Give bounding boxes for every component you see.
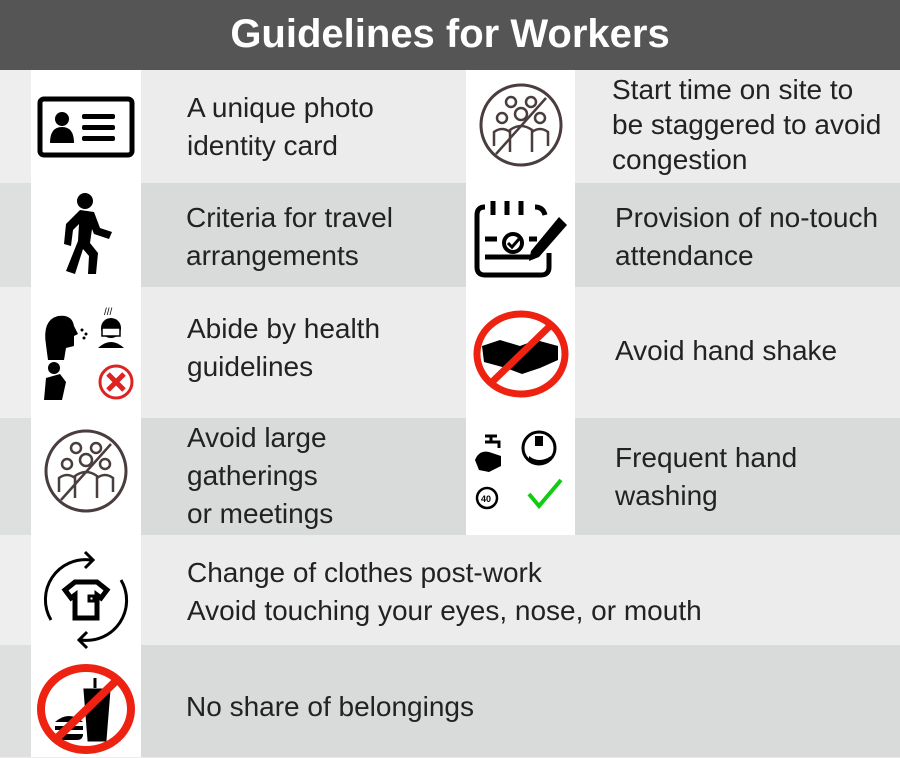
text: photo id: identity card bbox=[187, 130, 338, 161]
icon: health symptoms: /// bbox=[104, 307, 113, 318]
icon: walking person bbox=[64, 193, 112, 274]
text: staggered start: congestion bbox=[612, 144, 747, 175]
icon: no food sharing bbox=[37, 664, 135, 754]
text: attendance: Provision of no-touch bbox=[615, 202, 878, 233]
text: staggered start: Start time on site to bbox=[612, 74, 853, 105]
icon: no-touch attendance bbox=[474, 201, 567, 278]
text: gatherings: or meetings bbox=[187, 498, 333, 529]
left icon column bbox=[31, 70, 141, 757]
icon: staggered start bbox=[480, 84, 562, 166]
text: attendance: attendance bbox=[615, 240, 754, 271]
text: health bbox=[187, 313, 380, 382]
icon: hand washing bbox=[475, 430, 562, 510]
text: health: guidelines bbox=[187, 351, 313, 382]
title bar: Guidelines for Workers bbox=[230, 12, 670, 56]
text: hand washing: Frequent hand bbox=[615, 442, 797, 473]
icon: no gatherings bbox=[44, 430, 128, 512]
right icon column bbox=[466, 70, 575, 535]
icon: health symptoms bbox=[44, 307, 134, 400]
text: photo id: A unique photo bbox=[187, 92, 374, 123]
title bar bbox=[0, 0, 900, 70]
text: travel: Criteria for travel bbox=[186, 202, 393, 233]
text: clothes: Avoid touching your eyes, nose, or mouth bbox=[187, 595, 702, 626]
text: gatherings bbox=[187, 422, 333, 529]
icon: no handshake bbox=[474, 310, 568, 398]
text: travel bbox=[186, 202, 393, 271]
icon: id card bbox=[38, 96, 134, 158]
text: attendance bbox=[615, 202, 878, 271]
text: travel: arrangements bbox=[186, 240, 359, 271]
text: staggered start bbox=[612, 74, 881, 175]
text: handshake: Avoid hand shake bbox=[615, 335, 837, 366]
text: gatherings: Avoid large bbox=[187, 422, 327, 453]
text: clothes bbox=[187, 557, 702, 626]
text: belongings: No share of belongings bbox=[186, 691, 474, 722]
text: health: Abide by health bbox=[187, 313, 380, 344]
text: photo id bbox=[187, 92, 374, 161]
text: staggered start: be staggered to avoid bbox=[612, 109, 881, 140]
text: gatherings: gatherings bbox=[187, 460, 318, 491]
icon: hand washing: 40 bbox=[481, 494, 491, 504]
text: clothes: Change of clothes post-work bbox=[187, 557, 542, 588]
icon: change clothes bbox=[44, 551, 128, 649]
text: hand washing bbox=[615, 442, 797, 511]
text: hand washing: washing bbox=[615, 480, 718, 511]
